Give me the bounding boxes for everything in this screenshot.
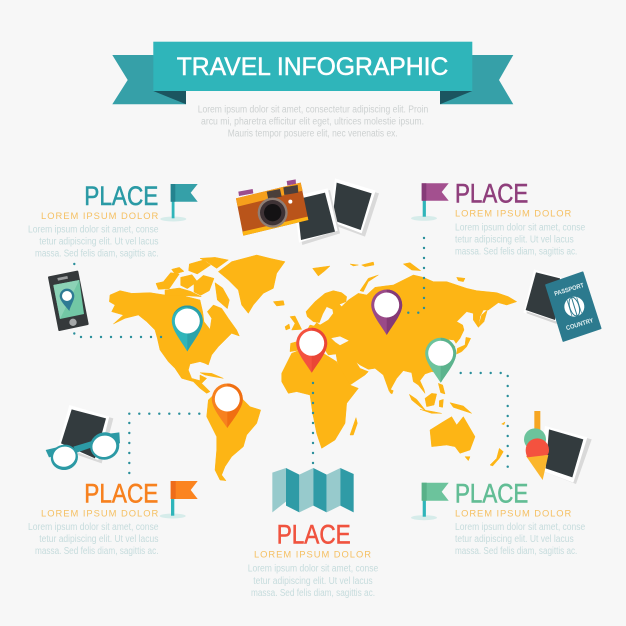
title ribbon banner: TRAVEL INFOGRAPHIC	[177, 54, 448, 81]
heading: place: PLACE	[277, 519, 351, 549]
icon: passport and photo	[523, 269, 601, 341]
panel: orange place	[28, 478, 198, 557]
body text: Lorem ipsum dolor sit amet, conse	[248, 564, 379, 575]
heading: place: PLACE	[455, 478, 528, 508]
icon: ice cream and photo	[524, 411, 592, 484]
pin: orange	[212, 384, 243, 428]
pin: teal	[172, 306, 203, 352]
body text	[28, 225, 159, 260]
body text: massa. Sed felis diam, sagittis ac.	[455, 546, 577, 557]
icon: purple flag	[411, 183, 449, 221]
subtitle text block: Mauris tempor posuere elit, nec venenatis ex.	[228, 129, 398, 140]
body text: tetur adipiscing elit. Ut vel lacus	[39, 534, 158, 545]
heading: place: PLACE	[84, 181, 158, 211]
subheading: LOREM IPSUM DOLOR	[254, 549, 371, 560]
panel: red place	[248, 519, 379, 599]
body text: massa. Sed felis diam, sagittis ac.	[455, 246, 577, 258]
body text: massa. Sed felis diam, sagittis ac.	[251, 588, 375, 599]
eurasia africa and australia	[282, 262, 517, 466]
subtitle text block	[198, 105, 428, 140]
body text	[455, 522, 586, 557]
pin: green	[425, 338, 456, 383]
body text: massa. Sed felis diam, sagittis ac.	[35, 546, 158, 557]
body text: tetur adipiscing elit. Ut vel lacus	[39, 237, 158, 248]
icon: camera and photos	[236, 178, 379, 245]
body text	[28, 522, 159, 557]
body text: massa. Sed felis diam, sagittis ac.	[35, 249, 158, 260]
icon: teal flag	[160, 184, 198, 222]
icon: green flag	[411, 483, 449, 520]
body text: tetur adipiscing elit. Ut vel lacus	[253, 576, 373, 587]
body text: tetur adipiscing elit. Ut vel lacus	[455, 235, 574, 246]
panel: green place	[411, 478, 586, 557]
pin: purple	[371, 290, 402, 335]
subtitle text block: arcu mi, pharetra efficitur elit eget, ultrices molestie ipsum.	[201, 117, 424, 128]
subheading: LOREM IPSUM DOLOR	[41, 508, 159, 519]
body text: Lorem ipsum dolor sit amet, conse	[28, 522, 159, 533]
icon: passport and photo: PASSPORT	[554, 282, 585, 298]
world map	[109, 255, 517, 481]
heading: place: PLACE	[84, 478, 158, 508]
icon: passport and photo: COUNTRY	[565, 317, 595, 332]
body text: tetur adipiscing elit. Ut vel lacus	[455, 534, 574, 545]
icon: orange flag	[160, 481, 198, 518]
americas and greenland	[109, 255, 285, 481]
body text: Lorem ipsum dolor sit amet, conse	[455, 522, 586, 533]
panel: purple place	[411, 179, 586, 258]
body text	[455, 223, 586, 258]
subheading: LOREM IPSUM DOLOR	[41, 210, 159, 221]
subheading: LOREM IPSUM DOLOR	[455, 508, 572, 519]
subheading: LOREM IPSUM DOLOR	[455, 208, 572, 219]
dotted connector lines	[73, 237, 509, 474]
body text	[248, 564, 379, 599]
panel: teal place	[28, 181, 198, 260]
icon: folded map	[272, 468, 354, 512]
title ribbon banner	[112, 42, 513, 104]
heading: place: PLACE	[455, 179, 528, 209]
pin: red	[296, 328, 327, 373]
body text: Lorem ipsum dolor sit amet, conse	[28, 225, 159, 236]
icon: sunglasses and photo	[46, 405, 122, 473]
subtitle text block: Lorem ipsum dolor sit amet, consectetur adipiscing elit. Proin	[198, 105, 428, 116]
icon: smartphone	[49, 272, 88, 330]
body text: Lorem ipsum dolor sit amet, conse	[455, 223, 586, 234]
